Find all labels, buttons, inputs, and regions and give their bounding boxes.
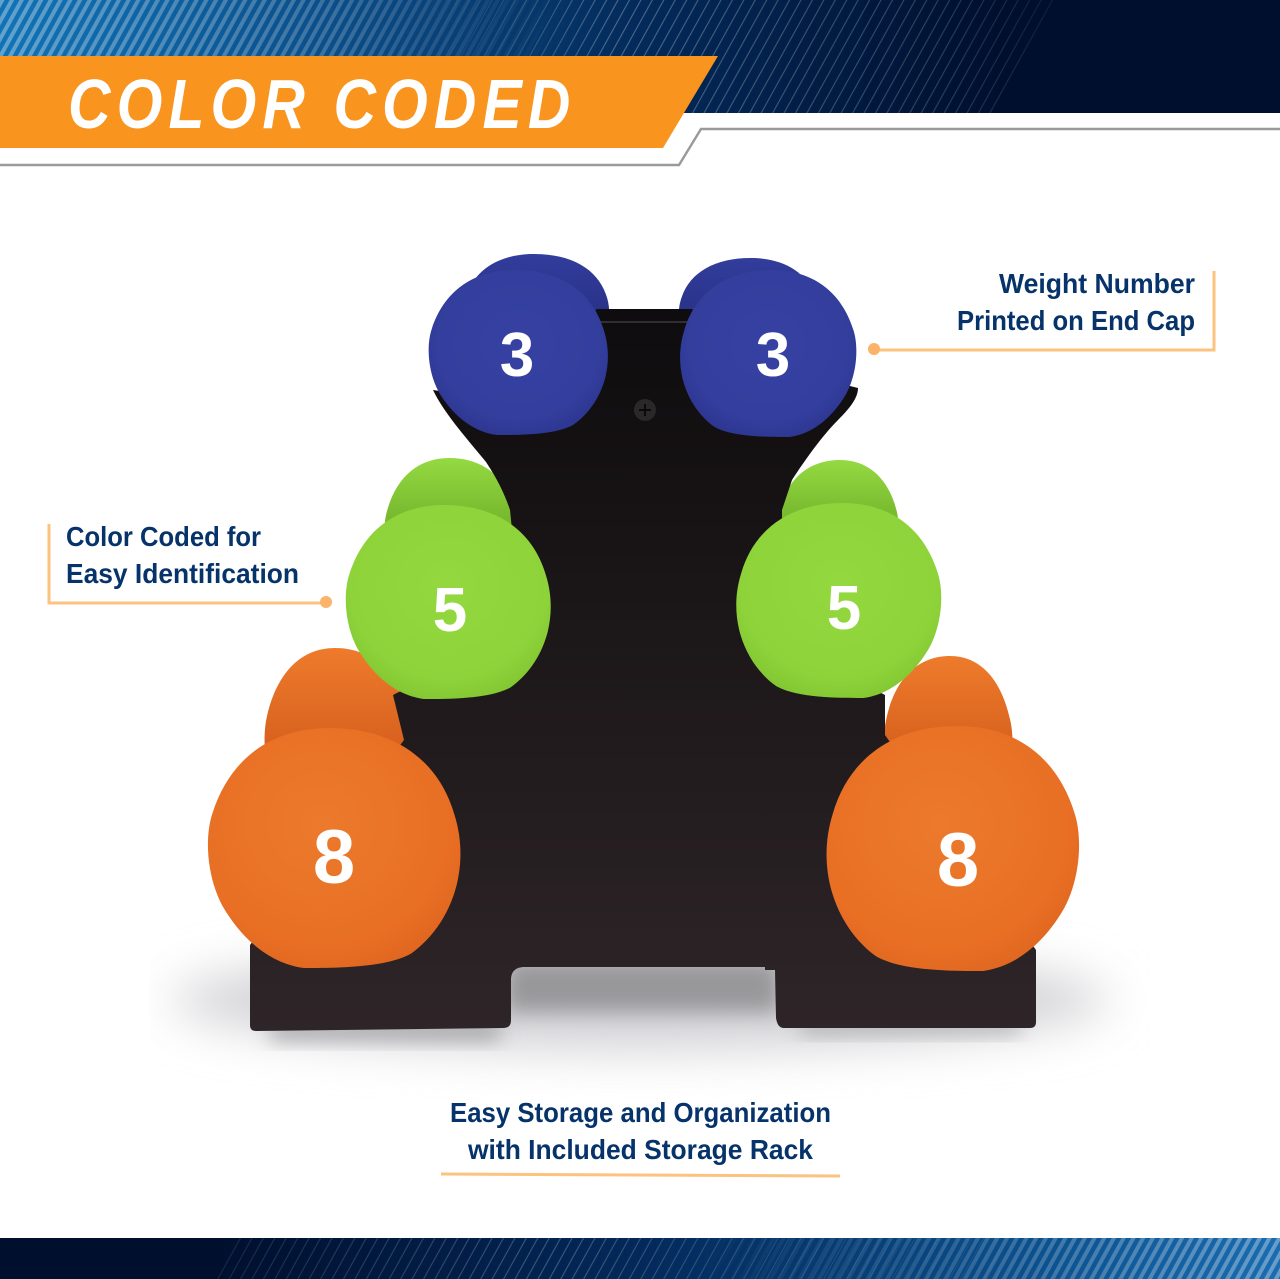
callout: color coded: Easy Identification — [66, 558, 299, 589]
weight number 8 left: 8 — [313, 815, 355, 900]
front dumbbell right — [736, 503, 941, 698]
front dumbbell left — [429, 270, 608, 435]
back green left — [384, 458, 519, 608]
header outline stroke — [0, 129, 1280, 165]
front dumbbell right — [680, 270, 856, 437]
title: COLOR CODED — [68, 64, 570, 143]
icon: rack screw — [634, 399, 656, 421]
front dumbbell left — [346, 505, 551, 699]
back blue right — [679, 258, 817, 363]
callout: color coded: Color Coded for — [66, 521, 261, 552]
back green right — [777, 460, 899, 600]
dumbbell pair: 3 lb blue — [429, 270, 856, 437]
weight number 5 left: 5 — [433, 576, 467, 645]
footer band — [0, 1238, 1280, 1279]
callout: storage — [441, 1097, 840, 1176]
dumbbell pair: 8 lb orange — [208, 726, 1079, 971]
callout: weight number: Printed on End Cap — [957, 305, 1195, 336]
callout: color coded — [49, 521, 332, 608]
back dumbbells — [265, 254, 1013, 838]
weight number 3 left: 3 — [500, 321, 534, 390]
callout: weight number: Weight Number — [999, 268, 1195, 299]
callout: storage: Easy Storage and Organization — [450, 1097, 831, 1128]
weight number 5 right: 5 — [827, 574, 861, 643]
back blue left — [465, 254, 609, 364]
back orange left — [265, 648, 411, 838]
rack top fold — [600, 321, 690, 323]
dumbbell rack — [250, 309, 1036, 1031]
floor shadow — [170, 950, 1110, 1050]
weight number 8 right: 8 — [937, 818, 979, 903]
header band — [0, 0, 1280, 113]
back orange right — [883, 656, 1013, 836]
callout: storage: with Included Storage Rack — [467, 1134, 813, 1165]
front dumbbell right — [827, 726, 1079, 971]
title banner — [0, 56, 718, 148]
dumbbell pair: 5 lb green — [346, 503, 941, 699]
callout: weight number — [868, 268, 1214, 355]
weight number 3 right: 3 — [756, 321, 790, 390]
front dumbbell left — [208, 728, 460, 968]
